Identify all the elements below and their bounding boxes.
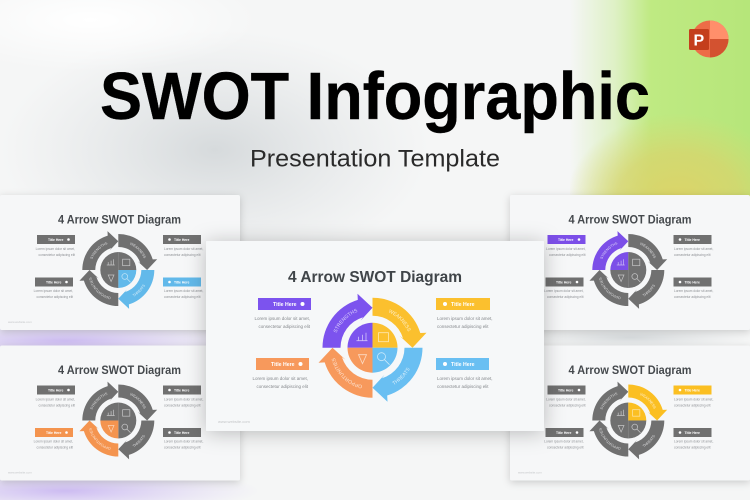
arrow: threats xyxy=(372,348,422,402)
label: top left: Title Here xyxy=(558,388,574,392)
diagram: four arrows: WEAKNESS xyxy=(640,242,656,258)
footer: www.website.com xyxy=(518,470,542,474)
arrow captions: OPPORTUNITIES xyxy=(332,358,362,388)
label: opportunities: Lorem ipsum dolor sit amet, xyxy=(252,376,308,381)
label: opportunities xyxy=(252,358,309,389)
label: bottom left: Title Here xyxy=(46,280,62,284)
label: weakness xyxy=(436,298,493,329)
label: bottom left: Lorem ipsum dolor sit amet, xyxy=(544,289,584,293)
label: top left: Title Here xyxy=(48,238,64,242)
label: top right: Lorem ipsum dolor sit amet, xyxy=(164,398,203,402)
diagram: four arrows xyxy=(590,231,668,309)
arrow: opportunities xyxy=(318,348,372,398)
label: strengths xyxy=(254,298,311,329)
label: strengths: Lorem ipsum dolor sit amet, xyxy=(254,316,310,321)
icon: PowerPoint logo: P xyxy=(694,32,704,50)
subtitle: Presentation Template xyxy=(250,146,500,172)
label: bottom right: consectetur adipiscing elit xyxy=(674,295,711,299)
label: top right xyxy=(674,235,713,257)
label: bottom right xyxy=(674,428,713,450)
label: threats: Lorem ipsum dolor sit amet, xyxy=(437,376,493,381)
heading: 4 Arrow SWOT Diagram xyxy=(288,269,462,286)
arrow captions: STRENGTHS xyxy=(334,308,358,332)
inner circle quadrants xyxy=(348,323,398,373)
label: top left xyxy=(546,235,586,257)
label: bottom left xyxy=(34,278,73,299)
label: bottom left: consectetur adipiscing elit xyxy=(547,295,584,299)
label: top left: Lorem ipsum dolor sit amet, xyxy=(36,398,75,402)
label: threats xyxy=(436,358,493,389)
arrow: weakness xyxy=(372,298,426,348)
label: top right xyxy=(163,235,203,257)
diagram: four arrows: THREATS xyxy=(642,435,655,447)
label: top right xyxy=(163,386,203,408)
label: weakness: Title Here xyxy=(451,302,475,308)
diagram: four arrows: THREATS xyxy=(132,284,145,296)
label: opportunities: consectetur adipiscing elit xyxy=(256,384,309,389)
diagram: four arrows: WEAKNESS xyxy=(130,242,146,258)
label: bottom right: Lorem ipsum dolor sit amet, xyxy=(674,440,713,444)
diagram: four arrows: STRENGTHS xyxy=(90,242,108,259)
title: SWOT Infographic xyxy=(100,59,650,134)
diagram: four arrows: WEAKNESS xyxy=(640,392,656,409)
label: bottom right: Title Here xyxy=(684,280,700,284)
label: strengths: Title Here xyxy=(273,302,297,308)
label: bottom left xyxy=(544,278,584,299)
label: bottom left xyxy=(544,428,584,450)
label: bottom left: Lorem ipsum dolor sit amet, xyxy=(34,289,73,293)
label: bottom left: Title Here xyxy=(556,431,572,435)
label: top right: consectetur adipiscing elit xyxy=(674,253,711,257)
label: bottom right: Title Here xyxy=(174,431,190,435)
diagram: four arrows: WEAKNESS xyxy=(130,392,146,409)
label: top right: consectetur adipiscing elit xyxy=(674,404,711,408)
panel: center slide xyxy=(195,232,555,444)
icon: PowerPoint logo xyxy=(689,20,728,58)
label: bottom left: Lorem ipsum dolor sit amet, xyxy=(544,440,584,444)
label: top right: Lorem ipsum dolor sit amet, xyxy=(674,247,713,251)
label: bottom left: Title Here xyxy=(556,280,572,284)
label: strengths: consectetur adipiscing elit xyxy=(258,324,311,329)
label: top left: consectetur adipiscing elit xyxy=(549,404,586,408)
heading: 4 Arrow SWOT Diagram xyxy=(568,364,692,377)
label: bottom right xyxy=(163,278,203,299)
label: bottom right: Lorem ipsum dolor sit amet, xyxy=(164,289,203,293)
label: bottom right: consectetur adipiscing elit xyxy=(674,446,711,450)
icons: chart, box, pin, magnifier xyxy=(356,333,390,365)
label: bottom right: Title Here xyxy=(684,431,700,435)
diagram: four arrows xyxy=(80,231,158,309)
heading: 4 Arrow SWOT Diagram xyxy=(58,214,181,226)
diagram: four arrows: STRENGTHS xyxy=(600,392,618,410)
label: bottom right: Lorem ipsum dolor sit amet, xyxy=(674,289,713,293)
label: bottom left: consectetur adipiscing elit xyxy=(36,446,73,450)
footer: www.website.com xyxy=(218,419,250,424)
label: top right: consectetur adipiscing elit xyxy=(164,404,201,408)
diagram: four arrows: STRENGTHS xyxy=(600,242,618,259)
diagram: four arrows: STRENGTHS xyxy=(90,392,108,410)
diagram: four arrows: THREATS xyxy=(132,435,145,447)
label: top left: consectetur adipiscing elit xyxy=(38,404,75,408)
label: bottom right: consectetur adipiscing elit xyxy=(164,295,201,299)
panel: slide bottom left, opportunities highlighted xyxy=(0,344,244,486)
label: top right: Lorem ipsum dolor sit amet, xyxy=(164,247,203,251)
label: opportunities: Title Here xyxy=(271,362,295,368)
label: top right: Title Here xyxy=(174,238,190,242)
label: top left xyxy=(36,235,75,257)
label: bottom right: Title Here xyxy=(174,280,190,284)
label: bottom left: consectetur adipiscing elit xyxy=(36,295,73,299)
diagram: four arrows: OPPORTUNITIES xyxy=(89,428,110,450)
heading: 4 Arrow SWOT Diagram xyxy=(568,214,692,226)
label: bottom left: Lorem ipsum dolor sit amet, xyxy=(34,440,73,444)
diagram: four arrows: OPPORTUNITIES xyxy=(599,428,620,450)
diagram: four colored arrows xyxy=(318,294,426,402)
arrow captions: THREATS xyxy=(392,368,410,384)
label: top left: Lorem ipsum dolor sit amet, xyxy=(546,398,586,402)
arrow captions: WEAKNESS xyxy=(389,309,411,332)
label: top right xyxy=(674,386,713,408)
panel: slide top right, strengths highlighted xyxy=(506,194,750,336)
label: bottom right xyxy=(163,428,203,450)
label: top right: Title Here xyxy=(684,388,700,392)
label: bottom left: Title Here xyxy=(46,431,62,435)
label: weakness: consectetur adipiscing elit xyxy=(437,324,489,329)
footer: www.website.com xyxy=(8,470,32,474)
diagram: four arrows: OPPORTUNITIES xyxy=(89,278,110,300)
label: threats: consectetur adipiscing elit xyxy=(437,384,489,389)
label: bottom right xyxy=(674,278,713,299)
label: top left: Title Here xyxy=(48,388,64,392)
panel: slide bottom right, weakness highlighted xyxy=(506,344,750,486)
label: top right: consectetur adipiscing elit xyxy=(164,253,201,257)
diagram: four arrows: THREATS xyxy=(642,284,655,296)
label: top right: Title Here xyxy=(684,238,700,242)
label: bottom right: consectetur adipiscing elit xyxy=(164,446,201,450)
heading: 4 Arrow SWOT Diagram xyxy=(58,364,181,377)
label: top left xyxy=(36,386,75,408)
footer: www.website.com xyxy=(8,320,32,324)
label: bottom left xyxy=(34,428,73,450)
diagram: four arrows xyxy=(590,382,668,460)
label: weakness: Lorem ipsum dolor sit amet, xyxy=(437,316,493,321)
panel: slide top left, threats highlighted xyxy=(0,194,243,336)
label: top left: Lorem ipsum dolor sit amet, xyxy=(36,247,75,251)
label: bottom right: Lorem ipsum dolor sit amet, xyxy=(164,440,203,444)
arrow: strengths xyxy=(322,294,372,348)
label: top right: Title Here xyxy=(174,388,190,392)
label: top left: consectetur adipiscing elit xyxy=(38,253,75,257)
label: bottom left: consectetur adipiscing elit xyxy=(547,446,584,450)
label: top left: Lorem ipsum dolor sit amet, xyxy=(546,247,586,251)
diagram: four arrows xyxy=(80,382,158,460)
arrow captions xyxy=(332,308,411,388)
label: top left: consectetur adipiscing elit xyxy=(549,253,586,257)
label: threats: Title Here xyxy=(451,362,475,368)
label: top left xyxy=(546,386,586,408)
diagram: four arrows: OPPORTUNITIES xyxy=(599,278,620,300)
label: top right: Lorem ipsum dolor sit amet, xyxy=(674,398,713,402)
label: top left: Title Here xyxy=(558,238,574,242)
